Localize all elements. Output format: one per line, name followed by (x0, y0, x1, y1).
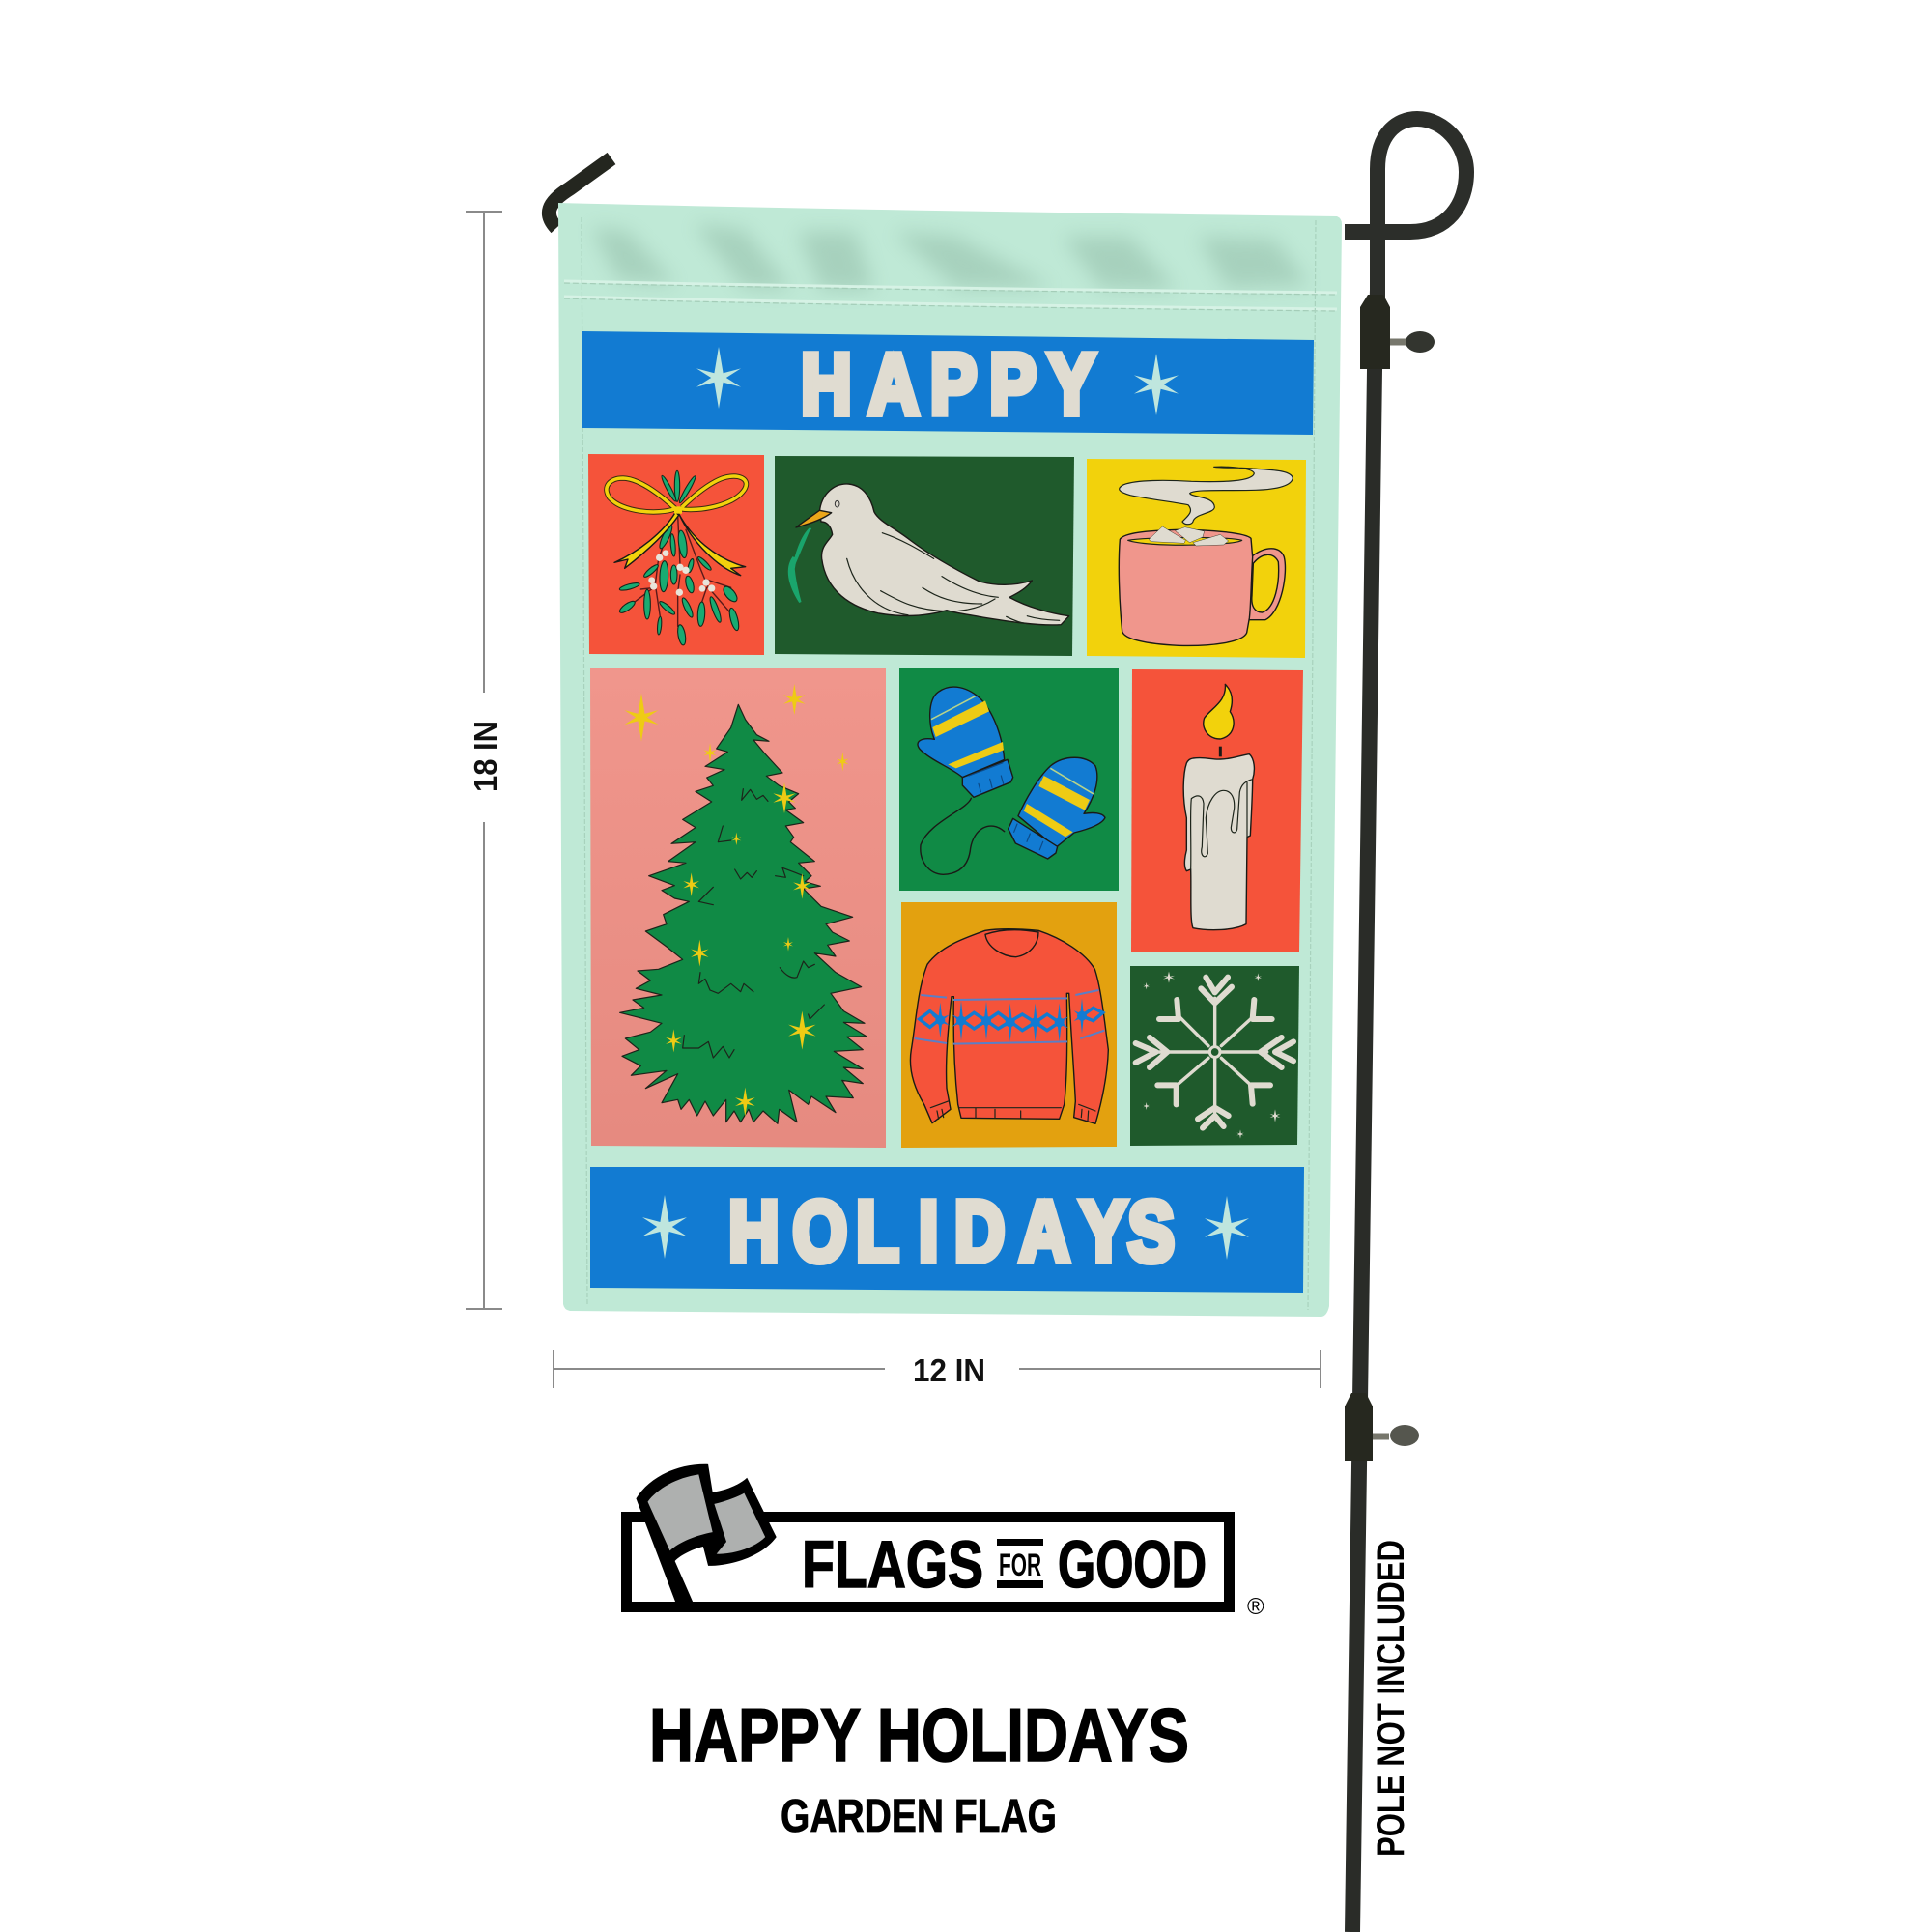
hem and cuff lines (930, 1101, 1095, 1121)
mitten cord (921, 798, 1005, 874)
leaves (618, 470, 741, 645)
panel: mistletoe (588, 454, 764, 655)
garden pole stand (549, 119, 1466, 1932)
panel: christmas tree (590, 668, 886, 1148)
steam (1120, 467, 1293, 525)
tree silhouette (620, 704, 867, 1123)
collar (985, 930, 1038, 957)
dimension: width 12 in (554, 1350, 1321, 1388)
logo flag icon (636, 1464, 777, 1612)
snowflake centre (1209, 1047, 1220, 1057)
berries (648, 550, 715, 596)
HAPPY banner (582, 331, 1314, 435)
flag (558, 203, 1342, 1317)
logo: Flags for Good (626, 1464, 1264, 1620)
label 18 IN: 18 IN (468, 721, 503, 792)
olive branch (789, 528, 810, 602)
stems (628, 515, 731, 626)
logo word GOOD: GOOD (1058, 1527, 1207, 1602)
label 12 IN: 12 IN (913, 1352, 985, 1388)
panel: snowflake (1130, 966, 1299, 1146)
right mitten (1009, 757, 1105, 859)
panel: cocoa mug (1087, 459, 1306, 658)
panel: sweater (901, 902, 1117, 1148)
lower sleeve with wing screw (1345, 1393, 1419, 1461)
eye (835, 500, 839, 507)
wing lines (847, 533, 1060, 624)
panel: mittens (899, 668, 1119, 891)
sweater shape (910, 929, 1108, 1123)
stars (642, 1195, 687, 1259)
HOLIDAYS banner (590, 1167, 1304, 1293)
candle body (1183, 754, 1254, 930)
mug body (1119, 529, 1253, 645)
logo word FOR: FOR (999, 1548, 1041, 1582)
pocket fold shading (591, 224, 1309, 290)
panel: dove (775, 456, 1074, 656)
mug handle (1248, 549, 1285, 620)
registered mark: ® (1247, 1594, 1264, 1620)
snowflake forks (1136, 978, 1293, 1128)
HOLIDAYS heading: HOLIDAYS (728, 1184, 1175, 1280)
left mitten (918, 687, 1013, 797)
flag fabric (558, 203, 1342, 1317)
product subtitle: GARDEN FLAG (781, 1791, 1057, 1842)
ribbon bow (607, 476, 746, 576)
upper sleeve with wing screw (1360, 295, 1435, 369)
product title: HAPPY HOLIDAYS (649, 1692, 1189, 1777)
branch detail lines (683, 789, 824, 1058)
logo frame (626, 1517, 1229, 1607)
wick (1219, 747, 1222, 756)
beak (796, 510, 832, 527)
snowflake arms (1156, 998, 1267, 1113)
flame (1204, 684, 1234, 739)
small snow specks (1143, 972, 1280, 1139)
stars (696, 347, 741, 409)
panel: candle (1131, 669, 1303, 952)
HAPPY heading: HAPPY (801, 337, 1094, 433)
tree and sky stars (624, 684, 849, 1117)
dove body (819, 484, 1069, 625)
marshmallows (1149, 526, 1229, 546)
pole shaft (1352, 290, 1378, 1932)
wax drips (1191, 780, 1253, 869)
left hanging hook (549, 158, 611, 228)
logo word FLAGS: FLAGS (802, 1527, 983, 1602)
pocket stitching (564, 217, 1337, 1310)
pole loop (1345, 119, 1466, 309)
logo word FOR (997, 1539, 1043, 1588)
cocoa surface (1128, 537, 1242, 545)
dimension: height 18 in (466, 212, 503, 1309)
knit band (915, 990, 1104, 1044)
pole note: POLE NOT INCLUDED (1370, 1540, 1412, 1857)
